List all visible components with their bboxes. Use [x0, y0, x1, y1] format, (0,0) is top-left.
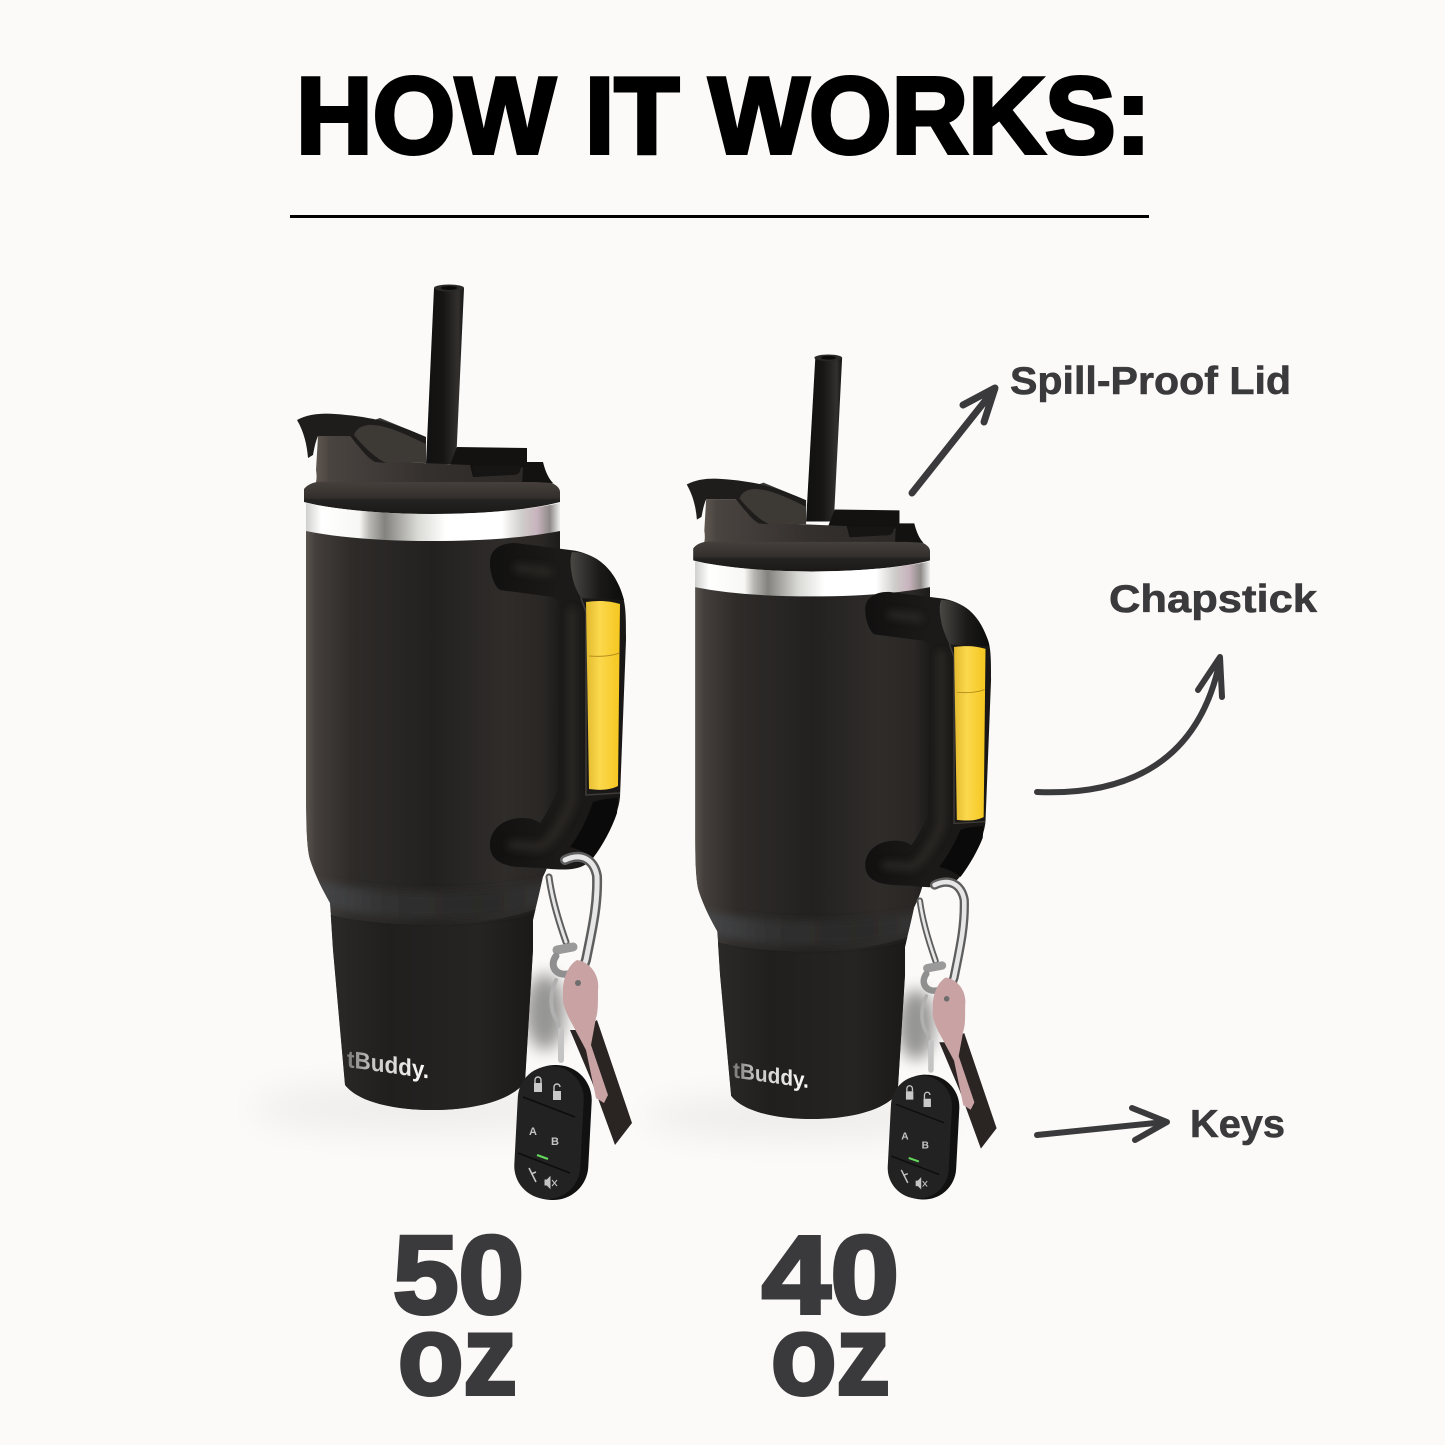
key	[933, 978, 974, 1110]
chamber top	[570, 552, 624, 600]
lower sleeve	[718, 937, 908, 1119]
floor shadow	[250, 974, 590, 1132]
arrow: chapstick	[1037, 657, 1222, 792]
key fob: A	[529, 1126, 537, 1138]
arrow: spill-proof lid	[912, 388, 995, 493]
number 50: 50	[393, 1214, 524, 1337]
unit oz: oz	[398, 1293, 517, 1418]
grip highlight	[886, 614, 941, 867]
title: HOW IT WORKS:	[296, 55, 1151, 177]
key fob	[513, 1063, 594, 1202]
chapstick	[954, 646, 986, 821]
capacity: 50 oz	[393, 1214, 524, 1418]
handle	[490, 543, 626, 870]
grip highlight	[512, 568, 572, 847]
floor shadow	[643, 990, 958, 1139]
carabiner	[920, 882, 964, 1070]
straw	[806, 355, 842, 522]
label: spill-proof lid: Spill-Proof Lid	[1010, 360, 1291, 403]
capacity: 40 oz	[762, 1214, 899, 1418]
handle	[865, 592, 991, 887]
label: chapstick: Chapstick	[1109, 578, 1317, 621]
tumbler: 50 oz	[250, 284, 632, 1202]
lower sleeve	[330, 910, 536, 1110]
label: keys: Keys	[1190, 1103, 1285, 1146]
strap	[939, 1033, 997, 1149]
number 40: 40	[762, 1214, 899, 1337]
fob casing	[888, 1073, 961, 1201]
fob casing	[515, 1063, 594, 1202]
key	[563, 960, 608, 1103]
lid	[687, 479, 930, 571]
lower window	[570, 798, 618, 858]
steel band	[306, 503, 560, 541]
tumbler body	[695, 582, 930, 1132]
arrow: keys	[1037, 1108, 1167, 1140]
strap	[570, 1020, 632, 1145]
chapstick	[586, 601, 620, 790]
unit oz: oz	[771, 1293, 890, 1418]
key fob: B	[551, 1136, 559, 1148]
lower window	[939, 826, 984, 877]
key fob: B	[922, 1141, 929, 1152]
steel band	[695, 561, 930, 596]
brand text: tBuddy.	[347, 1046, 429, 1084]
lid	[297, 414, 560, 514]
key fob	[886, 1073, 961, 1201]
keys and fob	[886, 882, 997, 1201]
taper band	[306, 878, 552, 919]
tumbler: 40 oz	[643, 355, 997, 1201]
key fob: A	[901, 1131, 909, 1142]
carabiner	[549, 857, 597, 1060]
tumbler body	[306, 525, 560, 1120]
chamber top	[940, 600, 989, 646]
straw	[426, 284, 464, 464]
brand text: tBuddy.	[733, 1058, 809, 1093]
taper band	[695, 908, 923, 946]
